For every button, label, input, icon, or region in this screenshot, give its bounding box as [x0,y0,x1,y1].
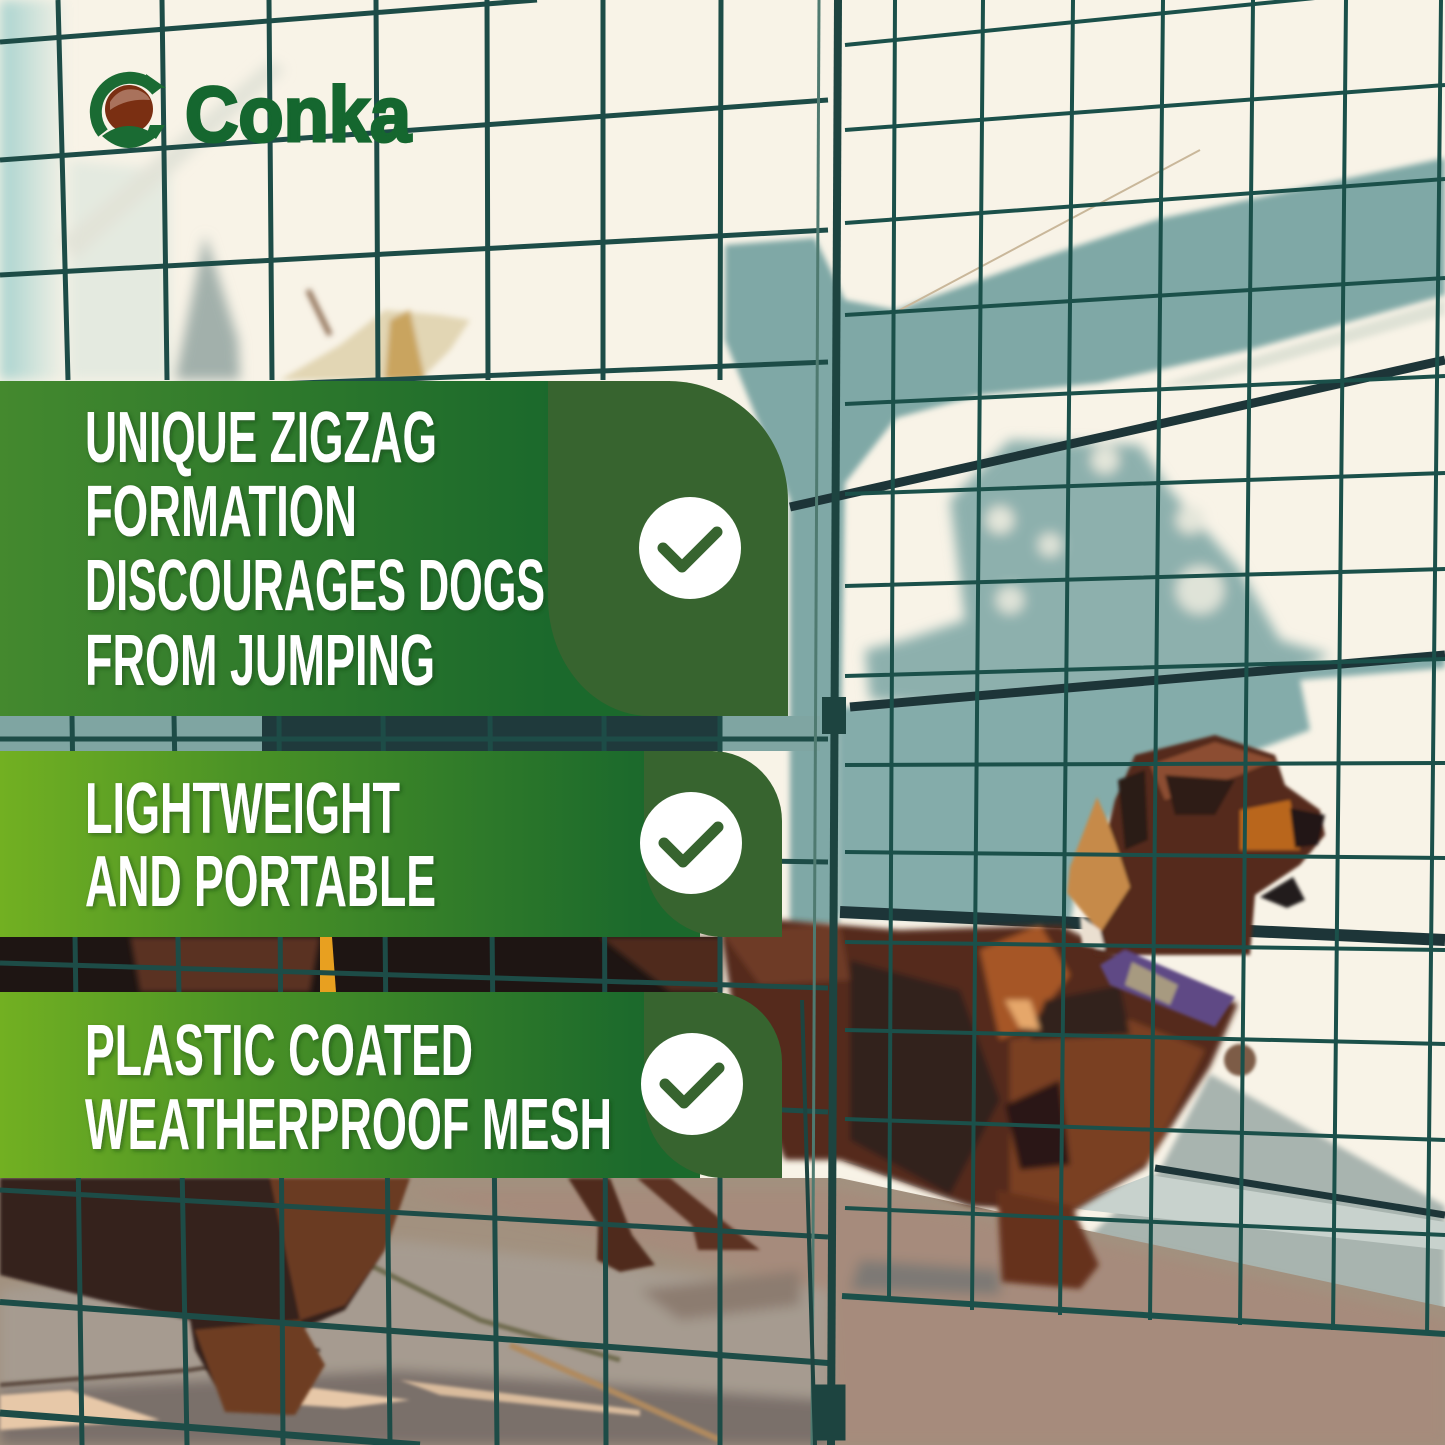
heading text [85,769,436,922]
icon: check [641,1033,743,1135]
logo wordmark: Conka [185,70,412,158]
strip between first and second panels [0,716,820,751]
left teal shadow [0,0,285,380]
heading text: PLASTIC COATED [85,1011,473,1091]
wall shadow band [725,158,1445,925]
floor tones [0,1190,1445,1445]
heading text [85,1011,612,1165]
heading text: UNIQUE ZIGZAG [85,398,437,478]
thin cable on wall [896,150,1200,312]
tree shadow on wall [865,440,1330,710]
back legs of foreground dog [568,1178,760,1272]
plant behind the fence [280,290,470,380]
fence post [802,0,846,1445]
foreground dog body [0,1178,410,1415]
panel: lightweight [0,751,782,937]
heading text: FORMATION [85,472,357,552]
floor [0,1178,1445,1445]
heading text: AND PORTABLE [85,842,436,922]
dark accent tab [548,381,788,716]
strip between second and third panels [0,937,722,992]
heading text: DISCOURAGES DOGS [85,546,545,626]
logo mark [96,74,166,148]
logo [96,70,412,158]
lower wall [838,655,1445,925]
panel: plastic coated [0,992,782,1178]
heading text: WEATHERPROOF MESH [85,1085,612,1165]
panel background [0,381,670,716]
dark accent tab [644,751,782,937]
floor sun patches [0,1260,720,1440]
rails [790,360,1445,1215]
right fence panel [842,0,1445,1335]
dog behind panel [720,920,1238,1289]
panel background [0,992,700,1178]
dog head [1067,735,1325,1076]
lower right wall grey [1085,1074,1445,1320]
dark accent tab [644,992,782,1178]
panel background [0,751,700,937]
left fence panel [0,0,828,1445]
skirting [840,1160,1445,1250]
panel: zigzag formation [0,381,788,716]
icon: check [639,497,741,599]
heading text: LIGHTWEIGHT [85,769,400,849]
icon: check [640,792,742,894]
heading text: FROM JUMPING [85,621,435,701]
heading text [85,398,545,701]
